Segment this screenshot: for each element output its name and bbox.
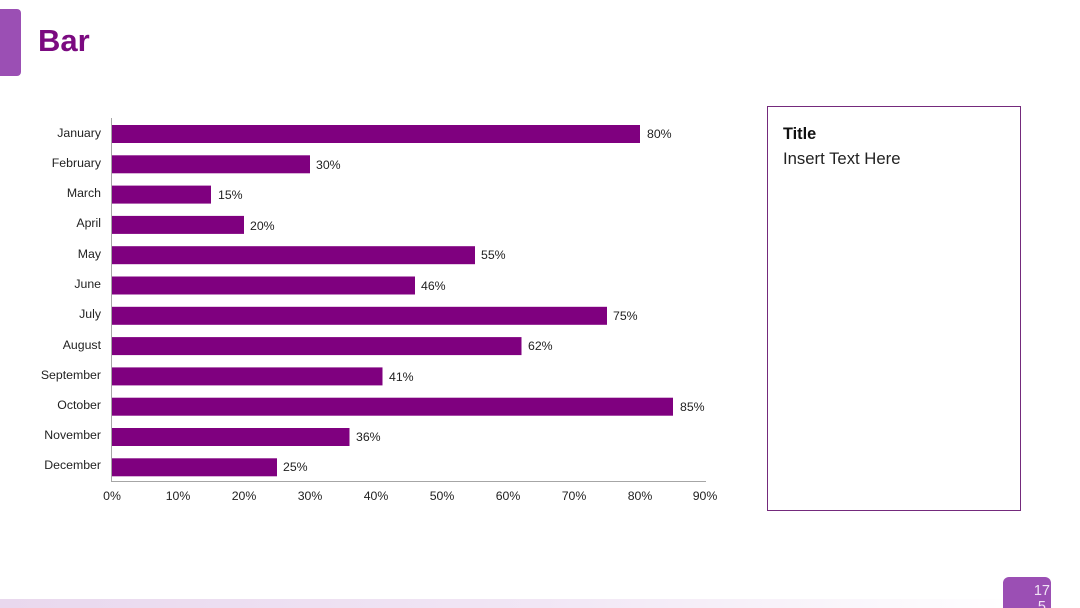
value labels: 25% [283,460,308,474]
value labels: 62% [528,339,553,353]
x axis labels [103,489,717,503]
page number badge: 17 [1034,583,1050,599]
bars [112,125,673,476]
x axis labels: 80% [628,489,652,503]
month labels: September [41,368,101,382]
value labels: 85% [680,400,705,414]
value labels [218,127,705,474]
header accent tab [0,9,21,76]
x axis labels: 10% [166,489,190,503]
month labels: October [57,398,101,412]
value labels: 75% [613,309,638,323]
month labels: August [63,338,102,352]
page number badge [1003,577,1051,608]
month labels [41,126,102,472]
x axis labels: 60% [496,489,520,503]
x axis labels: 70% [562,489,586,503]
x axis labels: 0% [103,489,121,503]
value labels: 30% [316,158,341,172]
text panel [767,106,1021,511]
footer gradient band [0,599,1080,608]
month labels: December [44,458,101,472]
month labels: January [57,126,102,140]
value labels: 41% [389,370,414,384]
title: Bar [38,23,90,58]
panel body text: Insert Text Here [783,149,900,168]
x axis labels: 40% [364,489,388,503]
x axis labels: 20% [232,489,256,503]
panel title: Title [783,125,816,143]
month labels: March [67,186,101,200]
value labels: 80% [647,127,672,141]
month labels: May [78,247,102,261]
value labels: 55% [481,248,506,262]
bar chart [41,118,717,503]
x axis labels: 50% [430,489,454,503]
x axis labels: 30% [298,489,322,503]
value labels: 20% [250,219,275,233]
value labels: 46% [421,279,446,293]
month labels: June [74,277,101,291]
month labels: April [76,216,101,230]
month labels: November [44,428,101,442]
month labels: February [52,156,102,170]
value labels: 15% [218,188,243,202]
month labels: July [79,307,102,321]
value labels: 36% [356,430,381,444]
x axis labels: 90% [693,489,717,503]
axes [112,118,706,482]
